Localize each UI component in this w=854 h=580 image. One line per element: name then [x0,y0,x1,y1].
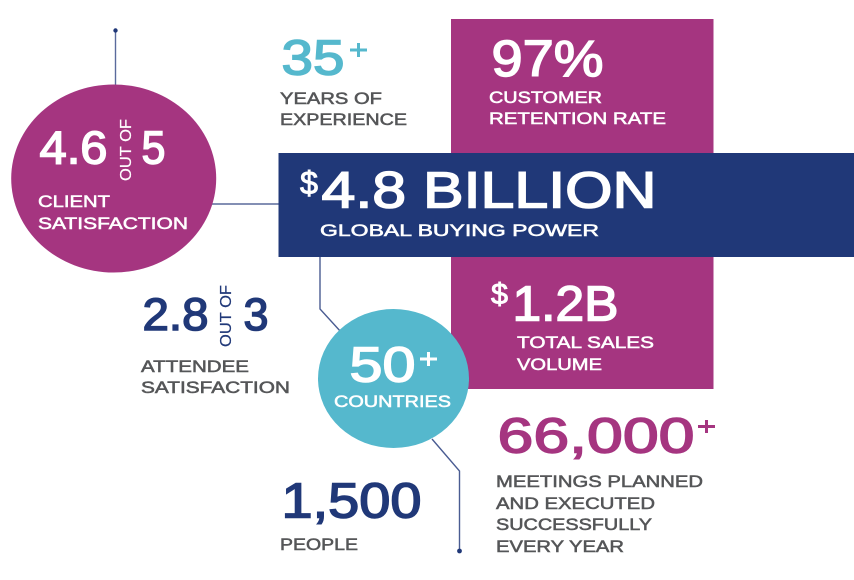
label: total sales volume: VOLUME [517,355,602,374]
label: customer retention rate: CUSTOMER [489,88,602,107]
label: years of experience: YEARS OF [280,89,382,108]
stat: people [280,474,422,554]
label: customer retention rate: RETENTION RATE [489,109,666,128]
value: 2.8: 2.8 [142,289,208,340]
value: 1,500: 1,500 [282,474,422,528]
connector: top dot to client circle [113,28,118,86]
label: people: PEOPLE [280,535,358,554]
label: years of experience: EXPERIENCE [280,110,407,129]
dollar sign: $ [300,165,318,201]
label: attendee satisfaction: SATISFACTION [141,378,290,397]
stat: years of experience [280,32,407,129]
value: 4.8 billion: 4.8 BILLION [322,162,656,218]
stat: customer retention rate [489,30,666,128]
label: meetings description: EVERY YEAR [496,537,624,556]
stat: client satisfaction circle [11,84,216,272]
plus sign [350,43,367,57]
label: global buying power: GLOBAL BUYING POWER [320,221,599,240]
dollar sign: $ [491,278,508,311]
label: meetings description: AND EXECUTED [496,494,655,513]
out of, vertical: OUT OF [118,119,135,181]
label: countries: COUNTRIES [334,392,451,411]
connector: countries circle to bottom dot [432,439,462,553]
panel: magenta column [451,19,714,389]
value: 5: 5 [142,122,166,174]
label: meetings description: MEETINGS PLANNED [496,472,703,491]
label: client satisfaction: SATISFACTION [38,214,188,233]
stat: countries circle [318,309,469,448]
value: 66,000: 66,000 [498,410,694,464]
label: total sales volume: TOTAL SALES [517,333,654,352]
value: 35: 35 [282,32,344,86]
label: client satisfaction: CLIENT [38,192,110,211]
plus sign [420,352,437,366]
panel: global buying power banner [278,153,854,257]
value: 3: 3 [244,289,268,340]
stat: total sales volume [491,278,654,374]
label: attendee satisfaction: ATTENDEE [141,357,249,376]
out of, vertical: OUT OF [218,285,235,347]
connector: banner to countries circle [320,257,341,332]
stat: attendee satisfaction [141,285,290,397]
value: 1.2B: 1.2B [512,278,618,332]
plus sign [698,420,715,433]
stat: meetings planned [496,410,715,556]
value: 50: 50 [350,338,416,392]
value: 4.6: 4.6 [40,122,108,174]
label: meetings description: SUCCESSFULLY [496,515,652,534]
connector: client circle to banner [212,203,279,205]
value: 97%: 97% [492,30,604,87]
